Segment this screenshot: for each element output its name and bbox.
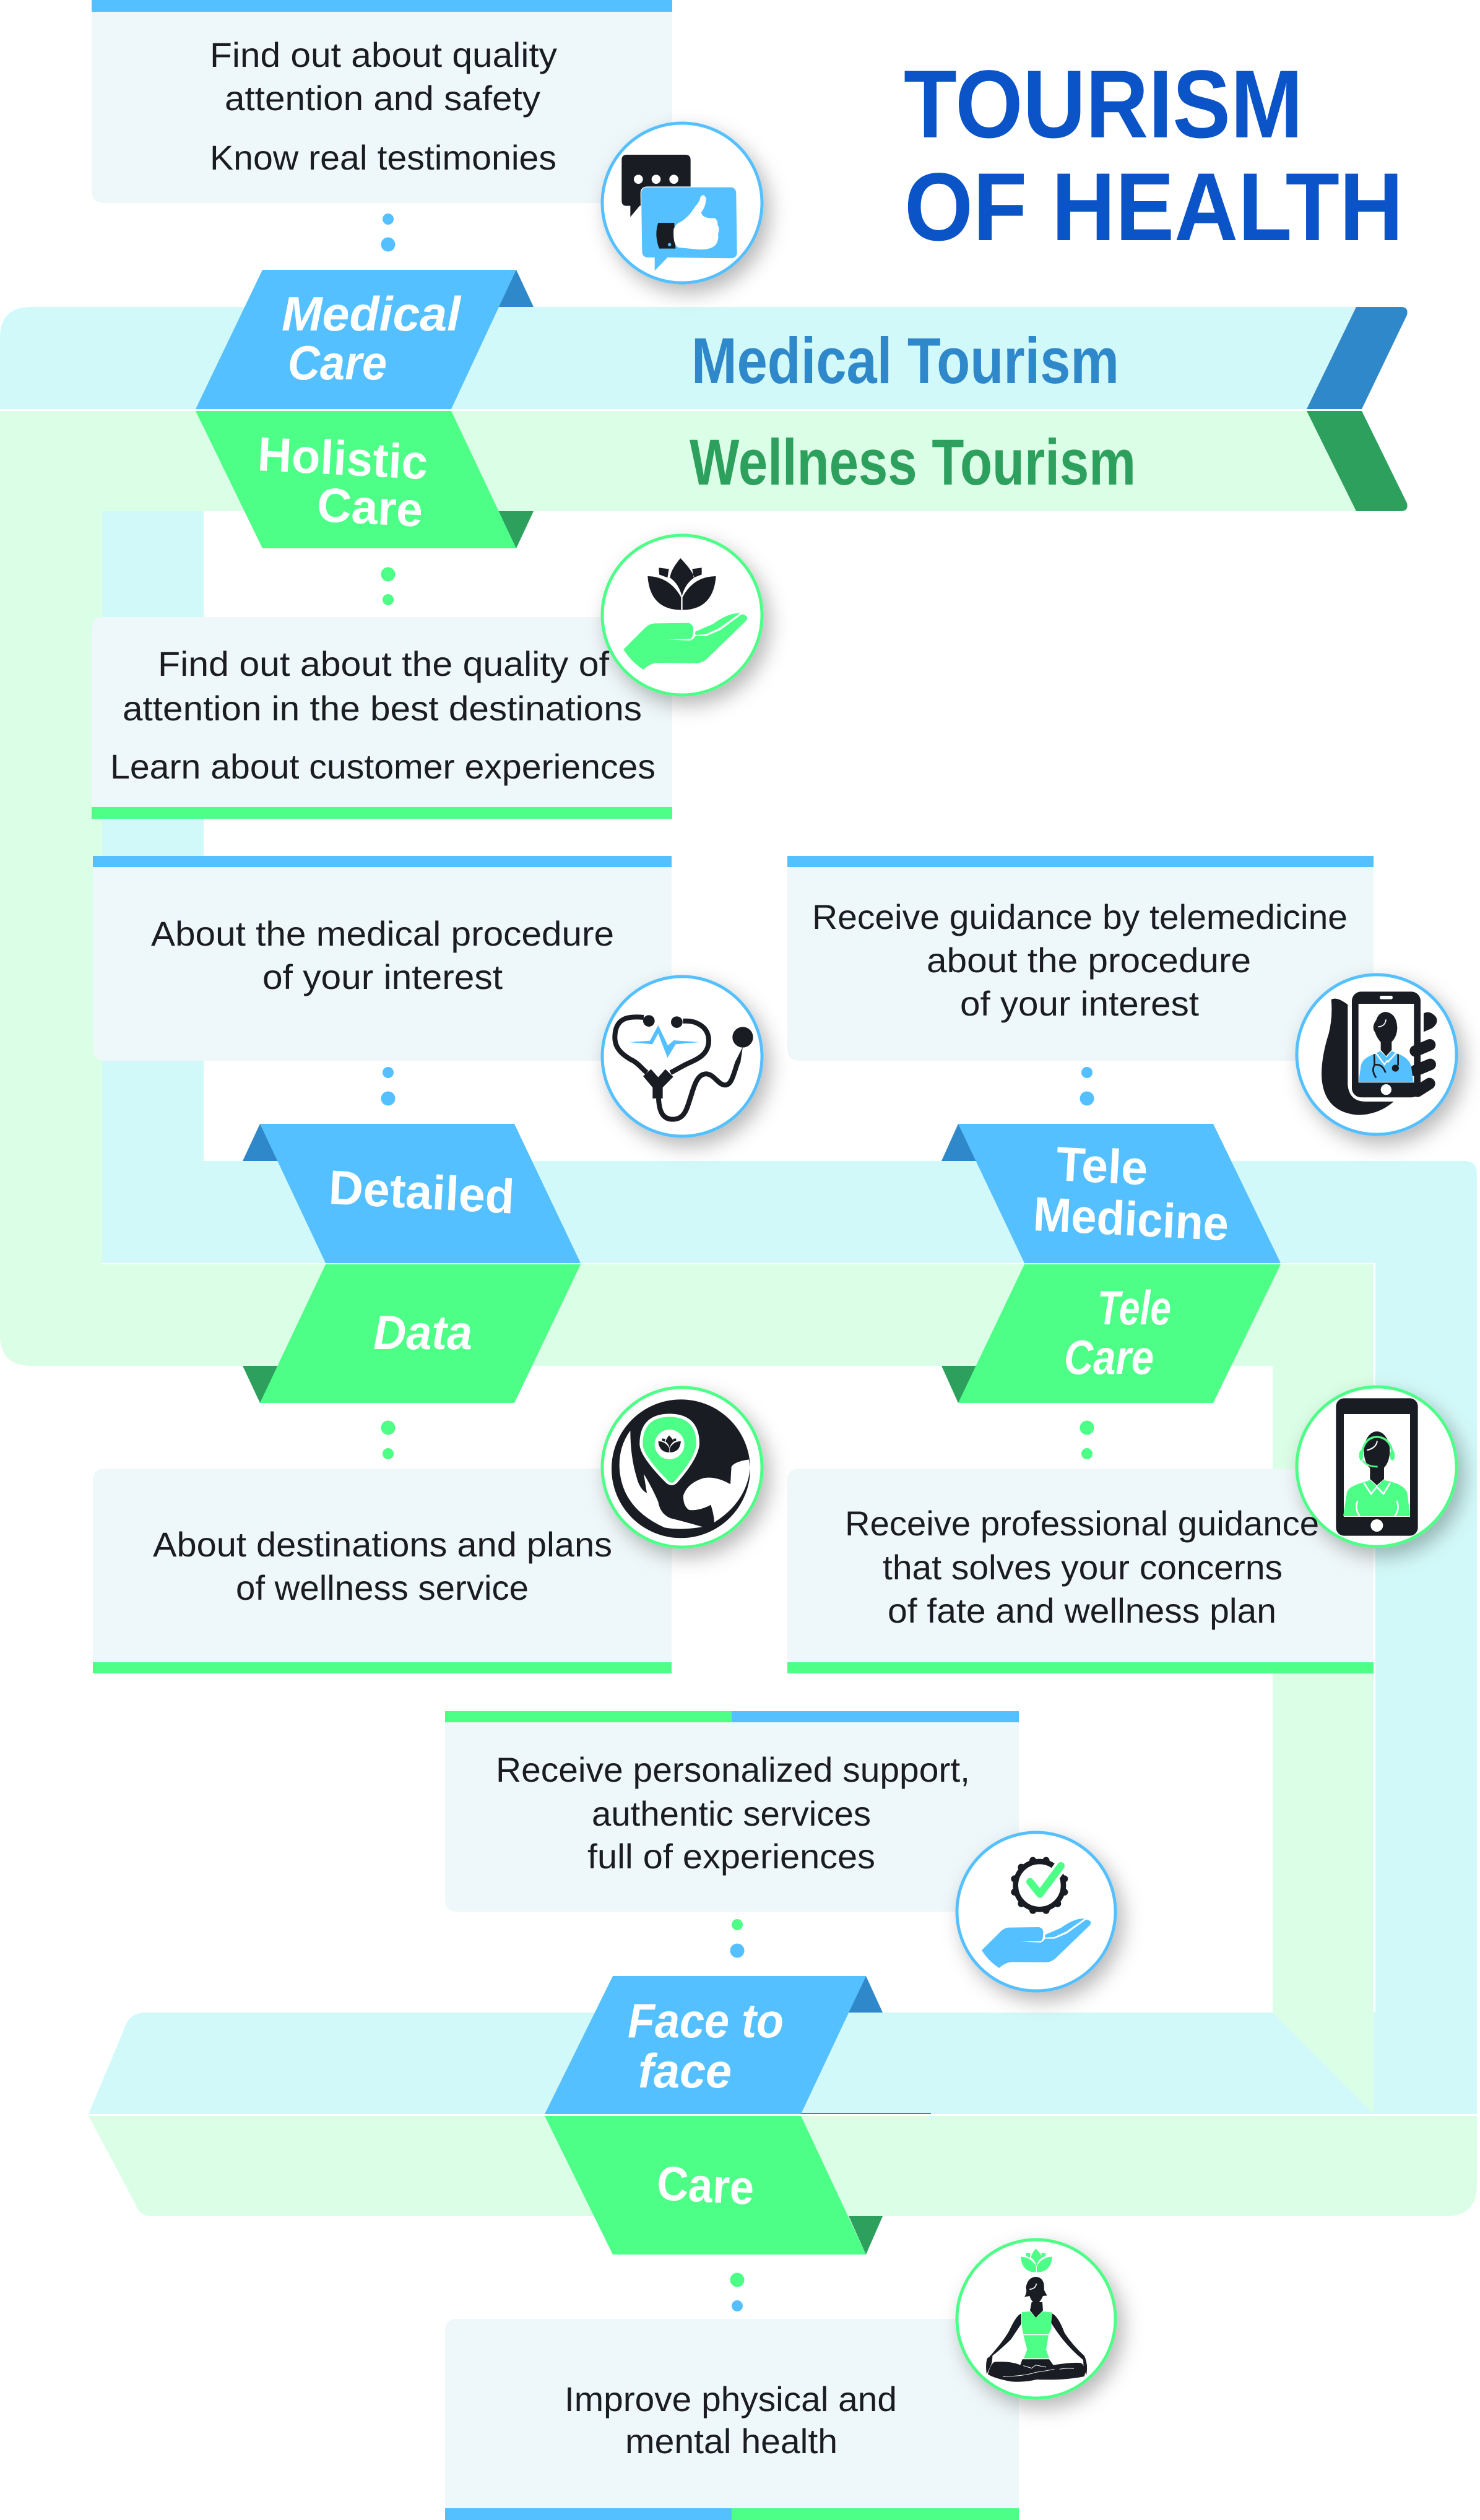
text: medical procedure	[151, 914, 614, 996]
text: telemedicine: of your interest	[960, 984, 1199, 1023]
icon: phone with headset agent	[1297, 1387, 1456, 1547]
text: personalized support: full of experiences	[587, 1837, 875, 1876]
text: destinations: of wellness service	[236, 1568, 529, 1607]
connector dots	[381, 214, 1094, 2311]
text: professional guidance: of fate and wellness plan	[888, 1591, 1276, 1630]
card background: destinations	[93, 1469, 672, 1673]
icon: chat bubbles with thumbs up	[602, 123, 762, 283]
text: testimonies: Know real testimonies	[210, 138, 556, 177]
flag: Tele Care: Tele	[1097, 1280, 1171, 1335]
text: medical procedure: of your interest	[262, 957, 503, 996]
flag: Medical Care: Medical	[282, 287, 461, 341]
light green ribbon: Wellness Tourism route	[0, 411, 1477, 2216]
flag: Tele Medicine	[941, 1124, 1281, 1263]
flag: Detailed: Detailed	[327, 1160, 516, 1224]
card background: medical procedure	[93, 856, 672, 1061]
flag: Face to face: Face to	[628, 1993, 784, 2048]
icon: meditating woman with lotus	[957, 2240, 1115, 2398]
flag: Holistic Care: Care	[316, 477, 424, 537]
flag: Data	[243, 1264, 581, 1403]
text: telemedicine: about the procedure	[927, 941, 1251, 980]
divider lines between ribbons	[0, 409, 1477, 2116]
text: physical and mental health: mental health	[625, 2422, 837, 2461]
heading: Medical Tourism: Medical Tourism	[691, 325, 1119, 397]
text: testimonies: attention and safety	[225, 79, 540, 118]
flag: Holistic Care: Holistic	[256, 426, 429, 490]
flag: Tele Care: Care	[1064, 1330, 1154, 1384]
text: customer experiences	[110, 644, 656, 786]
flag: Care: Care	[656, 2155, 756, 2215]
flag: Detailed	[243, 1124, 581, 1263]
text: professional guidance	[845, 1504, 1319, 1630]
text: physical and mental health: Improve physical and	[565, 2380, 897, 2419]
flag: Tele Care	[941, 1264, 1281, 1403]
flag: Medical Care	[196, 270, 534, 409]
text: testimonies: Find out about quality	[210, 35, 557, 74]
text: medical procedure: About the medical procedure	[151, 914, 614, 953]
text: customer experiences: Learn about customer experiences	[110, 747, 656, 786]
text: destinations: About destinations and plans	[153, 1525, 612, 1564]
flag: Data: Data	[373, 1305, 472, 1360]
text: telemedicine	[812, 897, 1348, 1023]
card background: customer experiences	[92, 617, 672, 819]
ribbon tip: Wellness Tourism	[1307, 411, 1408, 511]
flag: Medical Care: Care	[288, 335, 387, 390]
title	[904, 51, 1403, 261]
text: customer experiences: Find out about the quality of	[158, 644, 609, 683]
icon: stethoscope	[602, 977, 762, 1136]
text: personalized support: Receive personalized support,	[496, 1750, 970, 1789]
title: TOURISM	[904, 51, 1303, 158]
card background: personalized support	[445, 1711, 1019, 1912]
heading: Wellness Tourism: Wellness Tourism	[690, 426, 1136, 499]
ribbon tip: Medical Tourism	[1307, 307, 1408, 409]
card background: testimonies	[92, 0, 672, 203]
text: professional guidance: Receive professional guidance	[845, 1504, 1319, 1543]
text: testimonies	[210, 35, 557, 177]
text: customer experiences: attention in the best destinations	[123, 689, 642, 728]
flag: Face to face	[545, 1976, 931, 2115]
text: personalized support: authentic services	[592, 1794, 871, 1833]
flag: Tele Medicine: Medicine	[1032, 1186, 1230, 1251]
text: professional guidance: that solves your concerns	[883, 1548, 1283, 1587]
icon: lotus over green hand	[602, 535, 762, 695]
flag: Tele Medicine: Tele	[1055, 1136, 1149, 1196]
icon: globe with pin in hand	[602, 1387, 762, 1547]
title: OF HEALTH	[904, 153, 1403, 261]
card background: professional guidance	[787, 1469, 1374, 1673]
card background: physical and mental health	[445, 2319, 1019, 2520]
icon: hand holding phone with doctor	[1297, 975, 1456, 1134]
text: personalized support	[496, 1750, 970, 1876]
light blue ribbon: Medical Tourism route	[0, 307, 1477, 2114]
text: physical and mental health	[565, 2380, 897, 2461]
flag: Care	[545, 2116, 883, 2255]
card background: telemedicine	[787, 856, 1374, 1061]
flag: Holistic Care	[196, 411, 534, 548]
icon: quality badge over blue hand	[957, 1832, 1115, 1991]
text: destinations	[153, 1525, 612, 1607]
text: telemedicine: Receive guidance by telemedicine	[812, 897, 1348, 936]
flag: Face to face: face	[638, 2043, 732, 2098]
